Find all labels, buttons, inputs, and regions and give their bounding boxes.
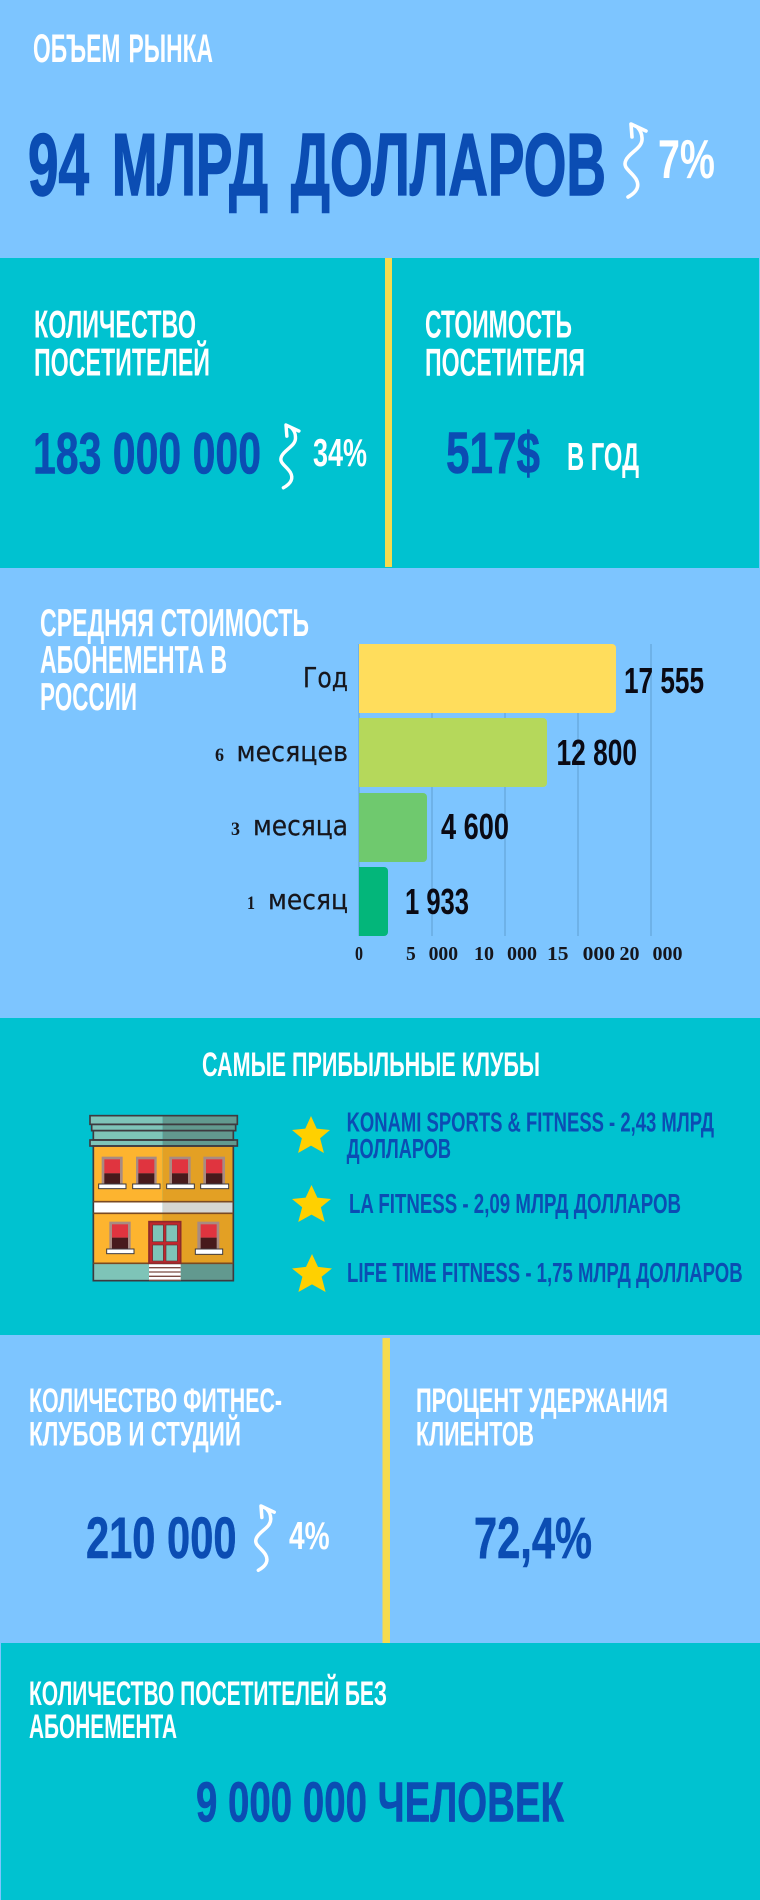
growth: 7 percent: 7% <box>658 128 715 190</box>
club: Konami: ДОЛЛАРОВ <box>347 1133 451 1164</box>
panel: most profitable clubs <box>0 1018 760 1335</box>
icon: growth arrow <box>625 124 646 197</box>
icon: star 1 <box>292 1116 330 1153</box>
heading: average membership cost in Russia: РОССИИ <box>40 676 137 719</box>
growth: 4 percent: 4% <box>289 1515 330 1558</box>
bar: 1 month: месяц <box>268 883 348 916</box>
heading: visitor cost: ПОСЕТИТЕЛЯ <box>425 342 585 384</box>
bar: 1 month <box>247 867 469 936</box>
axis labels: 0 <box>355 943 363 965</box>
bar: year: Год <box>303 661 348 694</box>
bar: year: 17 555 <box>624 660 704 701</box>
axis labels: 15 000 <box>547 943 615 965</box>
bar: 3 months: месяца <box>253 809 348 842</box>
panel: market size <box>0 0 760 258</box>
heading: visitors without membership: КОЛИЧЕСТВО ПОСЕТИТЕЛЕЙ БЕЗ <box>29 1673 387 1713</box>
heading: client retention rate: КЛИЕНТОВ <box>416 1416 534 1454</box>
heading: average membership cost in Russia: СРЕДНЯЯ СТОИМОСТЬ <box>40 602 309 645</box>
heading: average membership cost in Russia <box>40 602 309 719</box>
growth: 34 percent: 34% <box>313 432 367 475</box>
heading: number of clubs and studios <box>29 1382 282 1454</box>
panel: clubs count and retention <box>0 1335 760 1643</box>
bar: 3 months: 3 <box>231 819 240 840</box>
icon: club building <box>90 1116 237 1281</box>
heading: client retention rate <box>416 1382 668 1454</box>
bar chart: membership cost <box>215 644 704 965</box>
heading: visitor cost <box>425 304 585 384</box>
bar: 6 months: месяцев <box>236 735 348 768</box>
bar: 3 months <box>231 793 509 862</box>
axis labels <box>355 943 682 965</box>
icon: star 3 <box>292 1254 332 1292</box>
panel: visitors and visitor cost <box>0 258 759 568</box>
bar: 6 months <box>215 718 637 787</box>
heading: number of visitors <box>34 304 210 384</box>
icon: growth arrow <box>256 1506 274 1570</box>
heading: average membership cost in Russia: АБОНЕМЕНТА В <box>40 639 227 682</box>
heading: visitors without membership: АБОНЕМЕНТА <box>29 1708 177 1746</box>
heading: market size: ОБЪЕМ РЫНКА <box>33 27 213 71</box>
number: 210000 clubs: 210 000 <box>86 1506 236 1571</box>
icon: star 2 <box>292 1185 331 1222</box>
bar: 1 month: 1 <box>247 893 255 914</box>
number: 517 dollars: 517$ <box>446 421 540 486</box>
axis labels: 10 000 <box>474 943 537 965</box>
axis labels: 20 000 <box>620 943 682 965</box>
axis labels: 5 000 <box>406 943 458 965</box>
heading: number of visitors: ПОСЕТИТЕЛЕЙ <box>34 340 210 384</box>
label: per year: В ГОД <box>567 436 639 479</box>
bar: 6 months: 12 800 <box>556 732 637 773</box>
heading: visitor cost: СТОИМОСТЬ <box>425 304 572 346</box>
heading: number of clubs and studios: КЛУБОВ И СТУДИЙ <box>29 1414 241 1454</box>
icon: growth arrow <box>281 425 299 488</box>
heading: number of visitors: КОЛИЧЕСТВО <box>34 304 196 346</box>
bar: year <box>303 644 704 713</box>
bar: 1 month: 1 933 <box>405 881 469 922</box>
bar: 3 months: 4 600 <box>441 806 509 847</box>
number: 9000000 people: 9 000 000 ЧЕЛОВЕК <box>196 1771 564 1835</box>
club: Konami <box>347 1107 714 1164</box>
number: 72.4 percent: 72,4% <box>474 1506 592 1571</box>
panel: visitors without membership <box>1 1643 760 1900</box>
panel: average membership cost <box>0 568 760 1018</box>
number: visitors: 183 000 000 <box>33 422 261 486</box>
heading: visitors without membership <box>29 1673 387 1746</box>
heading: number of clubs and studios: КОЛИЧЕСТВО ФИТНЕС- <box>29 1382 282 1420</box>
heading: most profitable clubs: САМЫЕ ПРИБЫЛЬНЫЕ КЛУБЫ <box>202 1046 540 1084</box>
bar: 6 months: 6 <box>215 745 224 766</box>
